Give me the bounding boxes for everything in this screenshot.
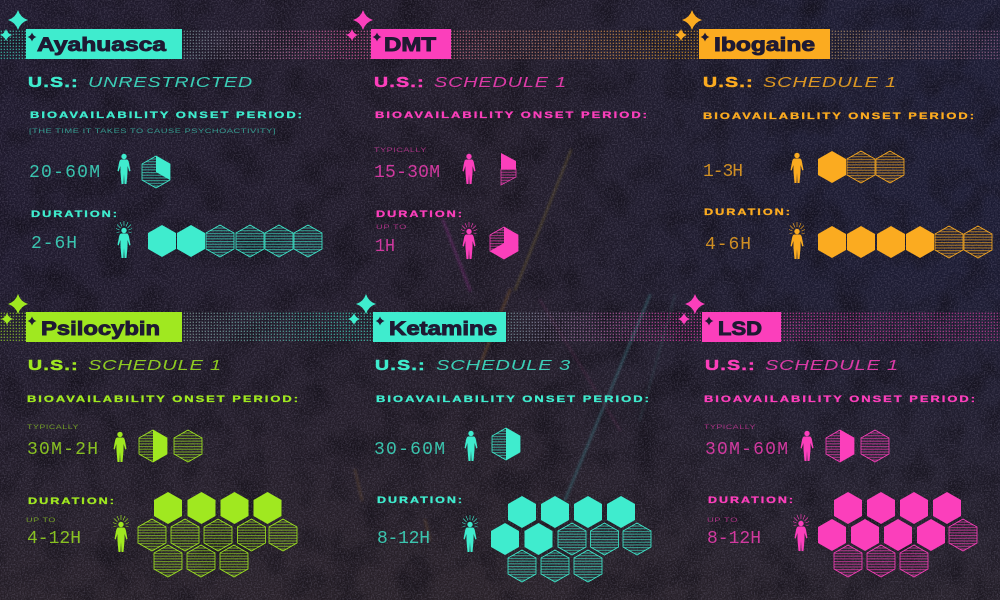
duration heading: DURATION: <box>31 209 119 220</box>
qualifier: TYPICALLY <box>374 147 427 154</box>
panel: Psilocybin <box>1 294 300 577</box>
icon: sparkles <box>678 294 705 325</box>
onset heading: BIOAVAILABILITY ONSET PERIOD: <box>376 394 651 405</box>
legal status: U.S.: <box>28 75 79 91</box>
dotted band: top row <box>0 29 1000 59</box>
onset heading: BIOAVAILABILITY ONSET PERIOD: <box>704 394 977 405</box>
heading: Ketamine <box>373 312 506 342</box>
duration hexagons <box>138 492 297 577</box>
heading: Ibogaine <box>699 29 830 59</box>
duration value: 4-12H <box>27 529 81 549</box>
onset note: [THE TIME IT TAKES TO CAUSE PSYCHOACTIVITY] <box>29 128 276 135</box>
qualifier: UP TO <box>26 517 56 524</box>
legal status: U.S.: <box>703 75 754 91</box>
onset value: 1-3H <box>703 162 743 182</box>
legal status value: SCHEDULE 1 <box>88 358 222 374</box>
legal status: U.S.: <box>375 358 426 374</box>
duration hexagon <box>490 227 518 259</box>
onset value: 30M-60M <box>705 440 788 460</box>
legal status value: SCHEDULE 1 <box>765 358 899 374</box>
duration hexagons <box>148 225 322 257</box>
heading: Ketamine: Ketamine <box>389 319 497 340</box>
icon: person <box>118 154 130 184</box>
icon: person <box>462 154 476 184</box>
heading: Ayahuasca: Ayahuasca <box>37 35 167 56</box>
onset hexagon <box>501 153 516 185</box>
heading: Ayahuasca <box>26 29 182 59</box>
duration value: 8-12H <box>707 529 761 549</box>
duration hexagons <box>818 492 977 577</box>
dotted band: bottom row <box>0 312 1000 342</box>
duration heading: DURATION: <box>376 209 464 220</box>
panel: Ibogaine <box>675 10 992 259</box>
icon: person <box>114 432 126 462</box>
panel: Ayahuasca <box>0 10 322 258</box>
legal status: U.S.: <box>705 358 756 374</box>
legal status value: UNRESTRICTED <box>88 75 253 91</box>
onset heading: BIOAVAILABILITY ONSET PERIOD: <box>703 111 976 122</box>
icon: person with rays <box>789 222 805 259</box>
duration heading: DURATION: <box>708 495 795 506</box>
onset hexagons <box>818 151 904 183</box>
panel: Ketamine <box>348 294 651 582</box>
heading: DMT <box>371 29 451 59</box>
icon: sparkles <box>675 10 702 41</box>
onset value: 30-60M <box>374 440 445 460</box>
icon: sparkles <box>346 10 373 41</box>
heading: LSD: LSD <box>718 319 762 340</box>
icon: person with rays <box>113 515 129 552</box>
legal status value: SCHEDULE 1 <box>763 75 897 91</box>
icon: sparkles <box>1 294 28 325</box>
qualifier: TYPICALLY <box>704 424 756 431</box>
icon: person <box>800 431 814 461</box>
icon: person with rays <box>462 515 478 552</box>
onset hexagon <box>492 428 520 460</box>
duration heading: DURATION: <box>28 496 116 507</box>
duration value: 8-12H <box>377 529 430 549</box>
duration value: 2-6H <box>31 234 77 254</box>
duration heading: DURATION: <box>704 207 792 218</box>
icon: person with rays <box>461 222 477 259</box>
heading: Ibogaine: Ibogaine <box>714 35 815 56</box>
duration hexagons <box>491 496 651 582</box>
legal status value: SCHEDULE 1 <box>434 75 567 91</box>
duration hexagons <box>818 226 992 258</box>
icon: person <box>790 153 804 183</box>
legal status: U.S.: <box>28 358 79 374</box>
heading: DMT: DMT <box>384 35 436 56</box>
icon: sparkles <box>0 10 28 41</box>
icon: person with rays <box>116 221 132 258</box>
onset hexagons <box>826 430 889 462</box>
icon: sparkles <box>348 294 376 325</box>
onset hexagons <box>139 430 202 462</box>
heading: Psilocybin: Psilocybin <box>41 319 160 340</box>
legal status: U.S.: <box>374 75 425 91</box>
duration heading: DURATION: <box>377 495 464 506</box>
panel: DMT <box>346 10 649 259</box>
duration value: 4-6H <box>705 235 751 255</box>
onset hexagon <box>142 156 170 188</box>
qualifier: TYPICALLY <box>27 424 79 431</box>
onset value: 15-30M <box>374 163 440 183</box>
icon: person <box>464 431 478 461</box>
onset heading: BIOAVAILABILITY ONSET PERIOD: <box>30 110 304 121</box>
qualifier: UP TO <box>707 517 738 524</box>
qualifier: UP TO <box>376 224 407 231</box>
panel: LSD <box>678 294 977 577</box>
onset heading: BIOAVAILABILITY ONSET PERIOD: <box>375 110 649 121</box>
icon: person with rays <box>793 514 809 551</box>
onset value: 30M-2H <box>27 440 98 460</box>
onset value: 20-60M <box>29 163 100 183</box>
heading: Psilocybin <box>26 312 182 342</box>
legal status value: SCHEDULE 3 <box>436 358 571 374</box>
heading: LSD <box>702 312 781 342</box>
onset heading: BIOAVAILABILITY ONSET PERIOD: <box>27 394 300 405</box>
duration value: 1H <box>375 237 395 257</box>
